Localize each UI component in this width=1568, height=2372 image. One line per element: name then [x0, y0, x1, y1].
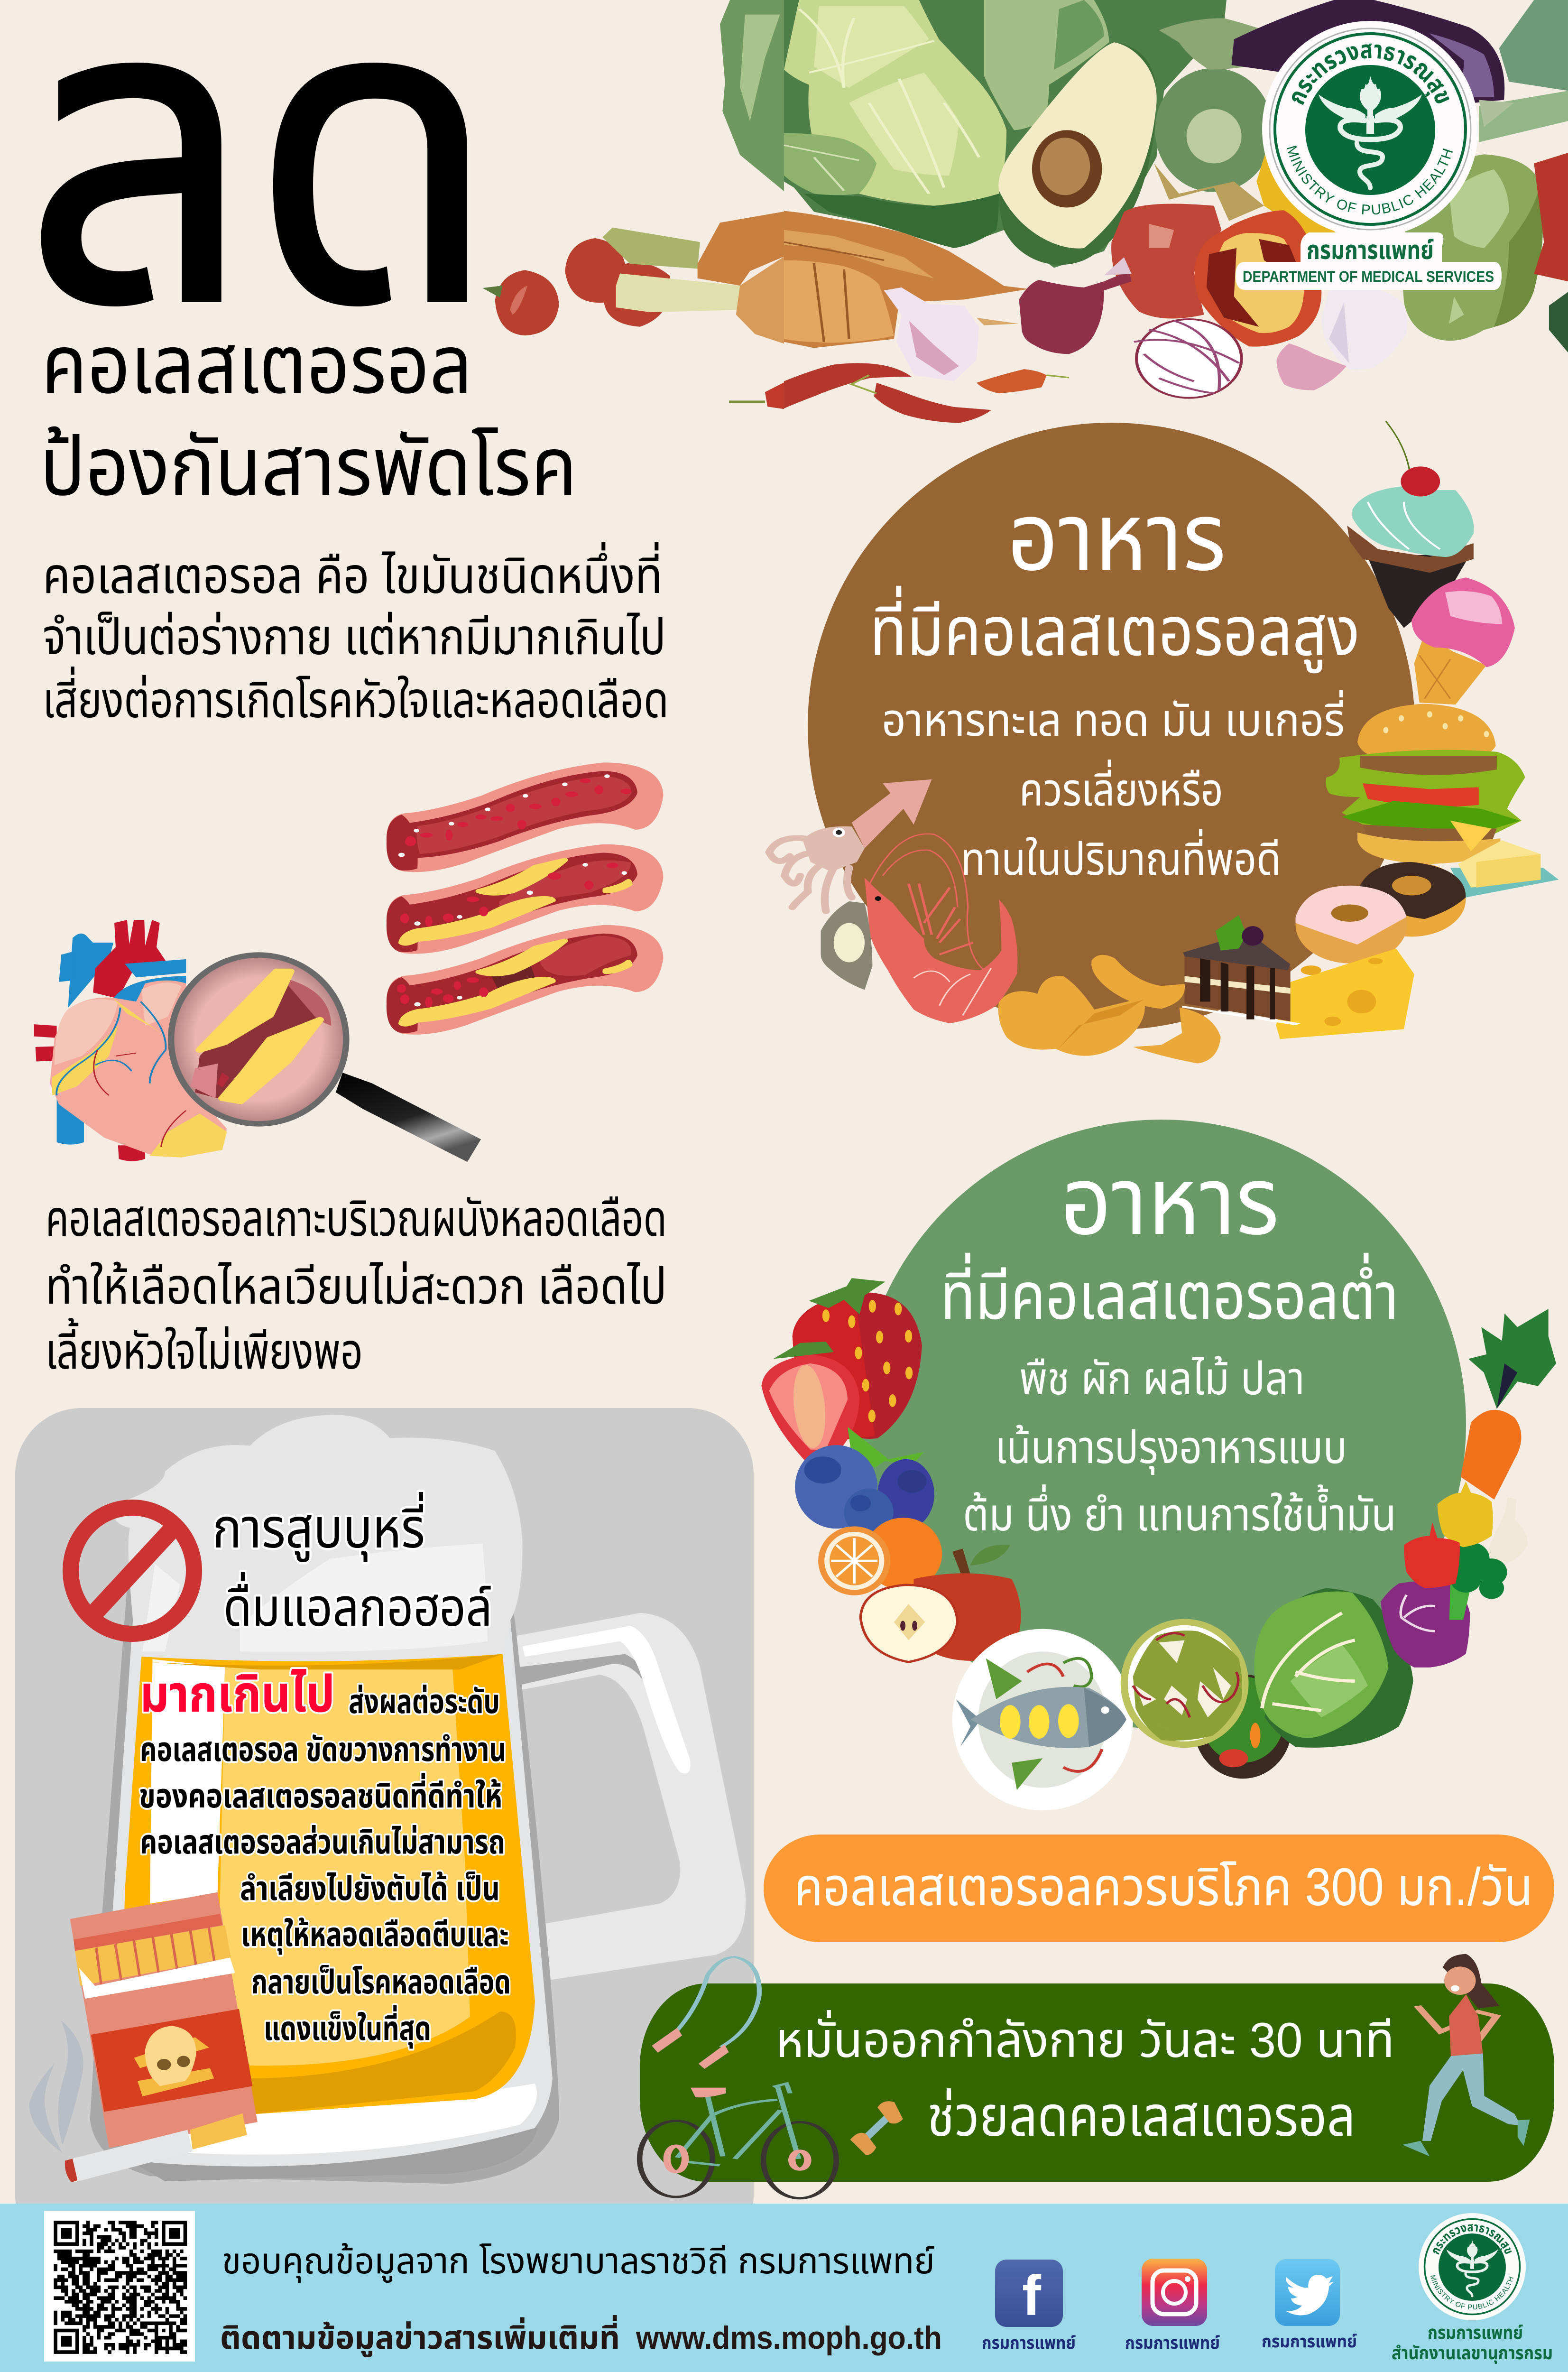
footer band [0, 2204, 1568, 2372]
callout: exercise [640, 1954, 1554, 2198]
circle background [857, 1120, 1466, 1729]
cigarette [65, 2113, 247, 2182]
heart body [50, 981, 227, 1158]
magnifying glass handle [336, 1073, 481, 1162]
icon: strawberries [761, 1278, 922, 1461]
icon: salad bowl [1194, 1674, 1292, 1779]
heading: อาหาร: อาหาร [1007, 484, 1226, 590]
text block: effect of excess: คอเลสเตอรอลส่วนเกินไม่สามารถ [140, 1824, 505, 1861]
text block: plaque explanation: ทำให้เลือดไหลเวียนไม่สะดวก เลือดไป [46, 1259, 667, 1315]
label: department of medical services [1236, 232, 1502, 290]
icon: oyster [821, 901, 872, 990]
body text: ต้ม นึ่ง ยำ แทนการใช้น้ำมัน [963, 1484, 1396, 1540]
illustration: heart with magnifying glass [34, 920, 481, 1162]
icon: cheese [1276, 948, 1414, 1039]
text block: definition of cholesterol: เสี่ยงต่อการเกิดโรคหัวใจและหลอดเลือด [43, 667, 669, 728]
body text: ควรเลี่ยงหรือ [1019, 760, 1223, 815]
text block: effect of excess: ส่งผลต่อระดับ [349, 1683, 500, 1720]
icon: ice cream [1411, 577, 1515, 704]
icon: garlic [1486, 1497, 1528, 1563]
icon: fish plate [952, 1629, 1133, 1810]
icon: facebook: กรมการแพทย์ [982, 2333, 1076, 2353]
illustration: vegetables header [482, 0, 1568, 423]
label: department of medical services: กรมการแพทย์ [1307, 236, 1434, 265]
label: department of medical services: DEPARTMENT OF MEDICAL SERVICES [1243, 268, 1494, 285]
follow text: www.dms.moph.go.th [636, 2320, 942, 2356]
emphasis: มากเกินไป: มากเกินไป [140, 1665, 335, 1723]
icons: low cholesterol foods [761, 1278, 1556, 1810]
icon: instagram [1125, 2259, 1220, 2353]
vessel: blocked [387, 925, 664, 1035]
text block: effect of excess: แดงแข็งในที่สุด [264, 2005, 431, 2048]
body text: พืช ผัก ผลไม้ ปลา [1019, 1353, 1305, 1404]
icon: cupcake [1347, 421, 1474, 628]
panel: low cholesterol food [761, 1120, 1556, 1810]
logo: Ministry of Public Health seal [1262, 21, 1478, 237]
icon: cabbage [1254, 1588, 1413, 1748]
text block: plaque explanation [46, 1191, 667, 1380]
logo: small ministry seal: MINISTRY OF PUBLIC HEALTH [1429, 2274, 1515, 2311]
body text: เน้นการปรุงอาหารแบบ [995, 1422, 1347, 1475]
icon: facebook: f [1022, 2264, 1042, 2327]
follow text [220, 2315, 942, 2357]
text block: effect of excess [139, 1665, 511, 2048]
icon: instagram: กรมการแพทย์ [1125, 2333, 1220, 2353]
body text: อาหารทะเล ทอด มัน เบเกอรี่ [882, 690, 1345, 746]
icon: no sign [71, 1508, 194, 1634]
heading: ที่มีคอเลสเตอรอลต่ำ: ที่มีคอเลสเตอรอลต่ำ [941, 1252, 1399, 1333]
panel: smoking and alcohol warning [15, 1408, 754, 2262]
callout: exercise: หมั่นออกกำลังกาย วันละ 30 นาที [775, 2010, 1394, 2068]
credit text: ขอบคุณข้อมูลจาก โรงพยาบาลราชวิถี กรมการแพทย์ [222, 2241, 935, 2283]
icon: broccoli [1449, 1542, 1507, 1620]
icon: facebook [982, 2260, 1076, 2353]
text block: definition of cholesterol: คอเลสเตอรอล คือ ไขมันชนิดหนึ่งที่ [43, 542, 663, 604]
vessel: plaque forming [387, 844, 664, 954]
heart vessels [34, 920, 186, 1161]
body text: ทานในปริมาณที่พอดี [961, 829, 1281, 885]
logo: small ministry seal: กระทรวงสาธารณสุข [1428, 2220, 1516, 2256]
cigarette pack [70, 1892, 258, 2148]
text block: plaque explanation: เลี้ยงหัวใจไม่เพียงพอ [46, 1318, 363, 1380]
icons: high cholesterol foods [769, 421, 1559, 1064]
illustration: cabbage, avocado, tomato, onion, garlic, chili, pepper [784, 0, 1568, 423]
icon: dumbbell [850, 2101, 903, 2155]
mug glass [90, 1548, 559, 2184]
circle background [808, 423, 1415, 1030]
beer foam [112, 1415, 523, 1660]
logo: small ministry seal [1419, 2213, 1526, 2320]
illustration: small tomatoes and scallion stalks [482, 0, 784, 409]
logo: Ministry of Public Health seal: MINISTRY OF PUBLIC HEALTH [1283, 144, 1456, 218]
follow text: ติดตามข้อมูลข่าวสารเพิ่มเติมที่ [220, 2315, 620, 2357]
icon: shrimp [865, 834, 1017, 1023]
text block: plaque explanation: คอเลสเตอรอลเกาะบริเวณผนังหลอดเลือด [46, 1191, 667, 1247]
icon: salad plate [1121, 1619, 1249, 1748]
illustration: three blood vessels with plaque [387, 762, 664, 1035]
icon: skull and bones [134, 2026, 214, 2096]
heading: ที่มีคอเลสเตอรอลสูง: ที่มีคอเลสเตอรอลสูง [870, 585, 1360, 673]
icon: twitter [1262, 2259, 1357, 2351]
heading: smoking: การสูบบุหรี่ [212, 1492, 425, 1562]
beer [120, 1654, 535, 2114]
text block: effect of excess: ลำเลียงไปยังตับได้ เป็น [240, 1870, 500, 1907]
vessel: healthy [387, 762, 664, 872]
icon: apple [860, 1545, 1021, 1662]
logo: Ministry of Public Health seal: กระทรวงสาธารณสุข [1282, 36, 1457, 109]
QR code [44, 2211, 195, 2362]
body text [963, 1353, 1396, 1540]
illustration: beer mug [90, 1415, 746, 2184]
icon: jump rope [652, 1957, 759, 2069]
icon: bell peppers [1404, 1482, 1493, 1588]
icon: butter on tray [1450, 840, 1559, 898]
mug handle [515, 1613, 746, 1981]
icon: squid [769, 779, 932, 911]
icon: runner [1402, 1954, 1530, 2156]
label: department office [1392, 2323, 1553, 2364]
icons: exercise [640, 1954, 1530, 2198]
icon: winged caduceus [1319, 76, 1422, 188]
icon: burger [1326, 704, 1525, 864]
text block: effect of excess: เหตุให้หลอดเลือดตีบและ [241, 1916, 509, 1955]
callout: 300 mg per day [764, 1835, 1554, 1942]
icon: carrot and leaves [1461, 1309, 1556, 1500]
magnifying glass lens [168, 952, 350, 1127]
text block: effect of excess: กลายเป็นโรคหลอดเลือด [251, 1964, 511, 2001]
text block: effect of excess: ของคอเลสเตอรอลชนิดที่ดีทำให้ [139, 1773, 502, 1815]
text block: definition of cholesterol: จำเป็นต่อร่างกาย แต่หากมีมากเกินไป [43, 609, 666, 665]
icon: donuts [1296, 862, 1466, 964]
panel: high cholesterol food [769, 421, 1559, 1064]
icon: potato chips [998, 955, 1221, 1064]
label: department office: กรมการแพทย์ [1428, 2323, 1523, 2343]
text block: definition of cholesterol [43, 542, 669, 728]
illustration: cigarette pack, cigarette and smoke [29, 1892, 258, 2182]
heading: อาหาร: อาหาร [1061, 1149, 1279, 1254]
heading: คอเลสเตอรอล ป้องกันสารพัดโรค: คอเลสเตอรอล [41, 319, 472, 410]
callout: exercise: ช่วยลดคอเลสเตอรอล [927, 2085, 1356, 2148]
icon: bicycle [640, 2084, 836, 2198]
icon: chocolate cake [1182, 915, 1301, 1025]
heading: drinking: ดื่มแอลกอฮอล์ [223, 1572, 492, 1637]
heading: คอเลสเตอรอล ป้องกันสารพัดโรค [40, 319, 577, 512]
body text [882, 690, 1345, 885]
icon: orange [818, 1518, 942, 1595]
smoke [29, 2020, 83, 2153]
label: department office: สำนักงานเลขานุการกรม [1392, 2344, 1553, 2364]
icon: blueberries [795, 1427, 934, 1536]
icon: twitter: กรมการแพทย์ [1262, 2332, 1357, 2351]
heading: คอเลสเตอรอล ป้องกันสารพัดโรค: ป้องกันสารพัดโรค [40, 421, 577, 512]
text block: effect of excess: คอเลสเตอรอล ขัดขวางการทำงาน [140, 1731, 506, 1768]
icon: purple cabbage [1381, 1581, 1470, 1668]
panel background [15, 1408, 754, 2262]
